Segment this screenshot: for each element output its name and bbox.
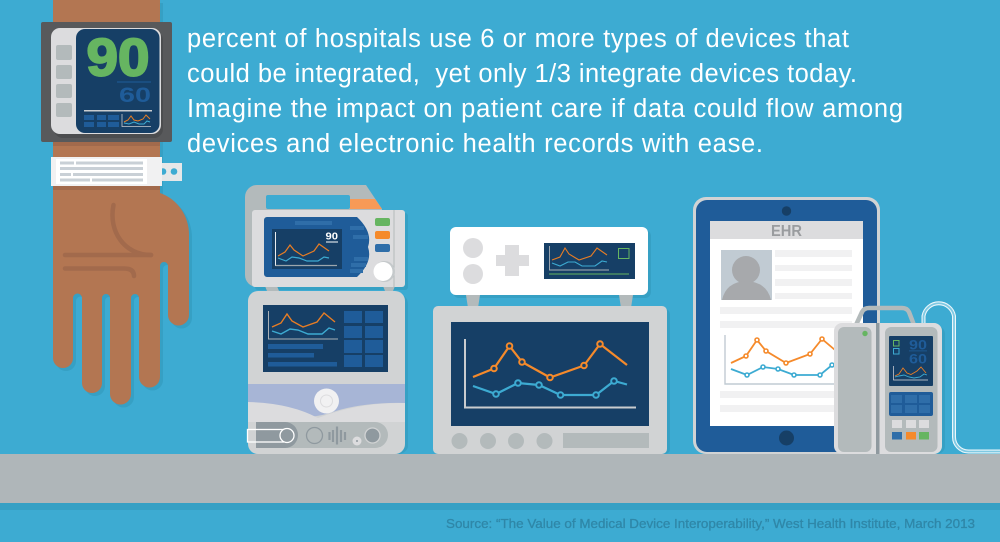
device: tablet with EHR [693,197,880,454]
source credit: Source: “The Value of Medical Device Interoperability,” West Health Institute, March 2013 [446,516,975,531]
hand [53,0,189,405]
device: infusion pump: 90 [909,336,927,352]
EHR document [710,221,863,426]
upper monitor [252,210,405,291]
watch: 90 [86,28,150,88]
watch: 60 [119,84,151,107]
base unit [433,306,670,454]
main statement text: could be integrated, yet only 1/3 integrate devices today. [187,60,857,88]
main statement text [187,25,903,158]
main statement text: percent of hospitals use 6 or more types of devices that [187,25,849,53]
watch [41,22,172,146]
device: infusion pump: 60 [909,350,927,366]
icon: hand with watch and wristband [41,0,192,408]
main statement text: devices and electronic health records with ease. [187,130,763,158]
wristband [51,157,182,190]
main statement text: Imagine the impact on patient care if data could flow among [187,95,903,123]
tubing [924,303,1000,452]
device: infusion pump [834,303,1000,454]
top console [450,227,651,308]
lower ventilator unit [248,291,408,454]
EHR document: EHR [771,223,802,240]
shelf [0,454,1000,510]
upper monitor: 90 [326,230,338,242]
handle [245,185,382,287]
device: patient monitor stack [245,185,408,454]
palm lines [65,205,151,276]
device: central monitor [433,227,670,454]
